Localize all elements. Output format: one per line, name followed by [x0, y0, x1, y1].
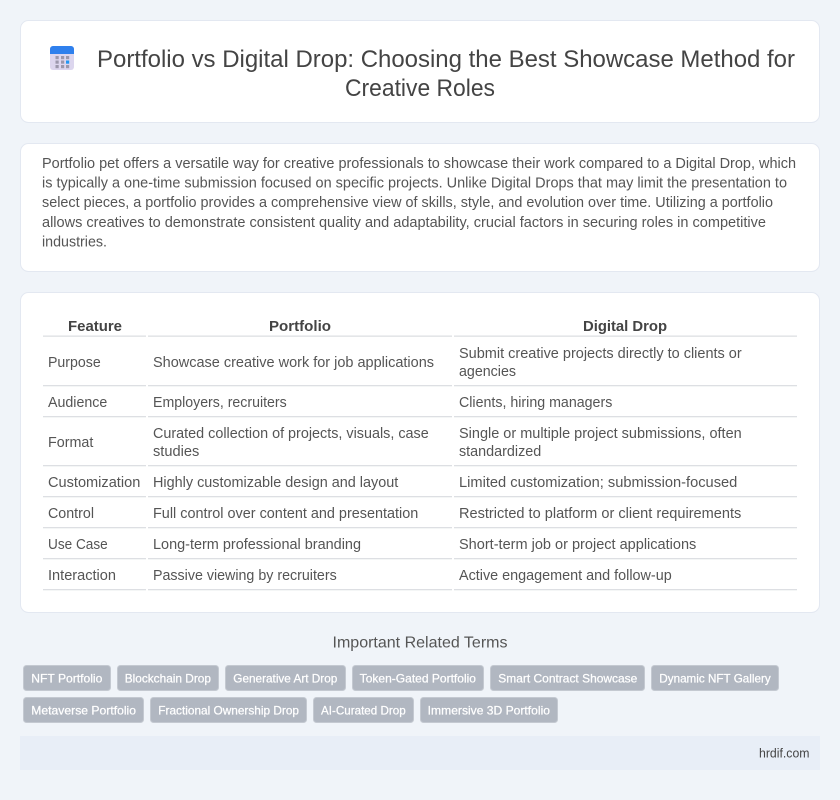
heading: important related terms: Important Related Terms [332, 634, 508, 652]
row: control: Control [48, 506, 94, 522]
table header [68, 319, 667, 335]
row: customization: Limited customization; submission-focused [459, 475, 737, 491]
row: purpose: agencies [459, 364, 516, 380]
title [97, 46, 795, 102]
tag: Token-Gated Portfolio [352, 666, 484, 690]
text block: intro: allows creatives to demonstrate consistent quality and adaptability, crucial factors in securing roles in competitive [42, 215, 766, 231]
tag: Token-Gated Portfolio: Token-Gated Portfolio [360, 671, 476, 685]
row: format: standardized [459, 444, 541, 460]
tag: Fractional Ownership Drop: Fractional Ownership Drop [158, 703, 299, 717]
tag: Metaverse Portfolio: Metaverse Portfolio [31, 703, 136, 717]
tag group: related terms [24, 666, 778, 722]
row: audience [48, 395, 612, 411]
tag: Blockchain Drop [118, 666, 218, 690]
row: audience: Employers, recruiters [153, 395, 287, 411]
row: format: studies [153, 444, 199, 460]
row: customization [48, 475, 737, 491]
tag: Fractional Ownership Drop [150, 698, 306, 722]
tag: NFT Portfolio: NFT Portfolio [31, 671, 103, 685]
table header: Portfolio [269, 319, 331, 335]
row: purpose: Submit creative projects directly to clients or [459, 346, 742, 362]
title: Portfolio vs Digital Drop: Choosing the Best Showcase Method for [97, 46, 795, 73]
tag: Dynamic NFT Gallery [652, 666, 778, 690]
row: format: Format [48, 435, 93, 451]
row: audience: Audience [48, 395, 107, 411]
row: audience: Clients, hiring managers [459, 395, 612, 411]
row: interaction: Interaction [48, 568, 116, 584]
row: format [48, 426, 742, 460]
text block: intro [42, 156, 796, 250]
tag: Dynamic NFT Gallery: Dynamic NFT Gallery [659, 671, 771, 685]
title: Creative Roles [345, 75, 495, 102]
panel: intro paragraph [20, 144, 820, 272]
icon: calendar [50, 46, 74, 70]
row: interaction: Passive viewing by recruiters [153, 568, 337, 584]
row: use case [48, 537, 696, 553]
footer bar: hrdif.com [759, 745, 810, 760]
panel: comparison table [20, 292, 820, 612]
row: format: Curated collection of projects, visuals, case [153, 426, 429, 442]
table header: Feature [68, 319, 122, 335]
tag: Metaverse Portfolio [24, 698, 144, 722]
row: format: Single or multiple project submissions, often [459, 426, 742, 442]
row: control: Full control over content and presentation [153, 506, 418, 522]
row: use case: Short-term job or project applications [459, 537, 696, 553]
table header: Digital Drop [583, 319, 667, 335]
panel: title card [20, 20, 820, 122]
tag: Generative Art Drop [226, 666, 346, 690]
row: purpose: Purpose [48, 355, 101, 371]
row: use case: Long-term professional branding [153, 537, 361, 553]
text block: intro: industries. [42, 234, 107, 250]
row: purpose [48, 346, 742, 380]
row: purpose: Showcase creative work for job applications [153, 355, 434, 371]
tag: Immersive 3D Portfolio [420, 698, 558, 722]
tag: AI-Curated Drop [314, 698, 414, 722]
tag: AI-Curated Drop: AI-Curated Drop [321, 703, 406, 717]
row: customization: Highly customizable design and layout [153, 475, 398, 491]
tag: Generative Art Drop: Generative Art Drop [233, 671, 338, 685]
row: control [48, 506, 741, 522]
row: customization: Customization [48, 475, 140, 491]
tag: Smart Contract Showcase: Smart Contract Showcase [498, 671, 638, 685]
tag: Blockchain Drop: Blockchain Drop [125, 671, 211, 685]
tag: NFT Portfolio [24, 666, 110, 690]
text block: intro: is typically a one-time submission focused on specific projects. Unlike Digital Drops that may limit the presentation to [42, 176, 787, 192]
tag: Smart Contract Showcase [490, 666, 644, 690]
footer bar [20, 736, 820, 770]
text block: intro: select pieces, a portfolio provides a comprehensive view of skills, style, and evolution over time. Utilizing a portfolio [42, 195, 773, 211]
row: use case: Use Case [48, 537, 108, 553]
tag: Immersive 3D Portfolio: Immersive 3D Portfolio [428, 703, 550, 717]
row: interaction [48, 568, 672, 584]
row: control: Restricted to platform or client requirements [459, 506, 741, 522]
row: interaction: Active engagement and follow-up [459, 568, 672, 584]
text block: intro: Portfolio pet offers a versatile way for creative professionals to showcase their work compared to a Digital Drop, which [42, 156, 796, 172]
